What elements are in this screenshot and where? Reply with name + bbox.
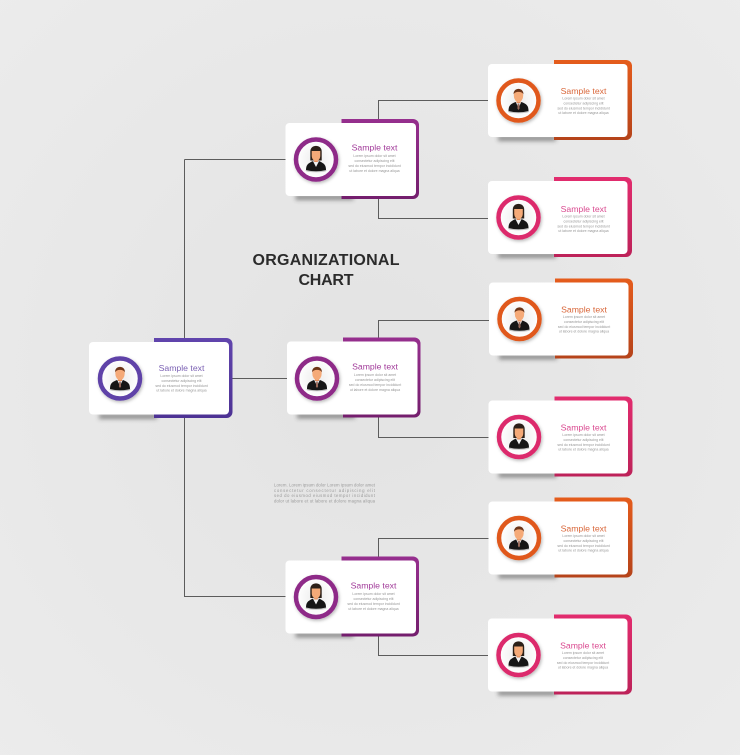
avatar ring [100, 358, 140, 398]
card colored backing [555, 278, 633, 358]
avatar ring [297, 358, 337, 398]
card colored backing [554, 498, 632, 578]
description text block: consectetur consectetur adipiscing elit [274, 488, 376, 493]
icon: man [306, 367, 328, 391]
card white panel [287, 342, 418, 414]
card white panel [488, 400, 628, 474]
card body text: sed do eiusmod tempor incididunt [557, 661, 609, 665]
card body text [558, 315, 610, 334]
card colored backing [154, 338, 232, 418]
description text block: Lorem. Lorem ipsum dolor Lorem ipsum dolor amet [274, 482, 376, 488]
connector lines [184, 100, 490, 656]
avatar ring [498, 635, 538, 675]
icon: man [508, 526, 530, 551]
card body text: sed do eiusmod tempor incididunt [557, 443, 610, 447]
card colored backing [342, 556, 419, 636]
description text block [274, 482, 376, 504]
avatar ring [499, 518, 539, 558]
card body text [557, 96, 610, 115]
card body text [557, 214, 610, 233]
card colored backing [554, 60, 632, 140]
icon: woman [508, 423, 530, 450]
card body text: ut labore et dolore magna aliqua [348, 607, 399, 611]
avatar ring [499, 417, 539, 457]
icon: woman [306, 583, 326, 610]
avatar ring [500, 299, 540, 339]
card body text: consectetur adipiscing elit [563, 539, 604, 543]
card heading: Sample text [159, 363, 205, 373]
card body text: consectetur adipiscing elit [564, 320, 604, 324]
card body text: consectetur adipiscing elit [354, 159, 395, 163]
card shadow [498, 574, 556, 578]
icon: man [509, 307, 530, 332]
card heading: Sample text [560, 640, 607, 650]
card shadow [499, 354, 557, 360]
description text block: dolor ut labore et ut labore et dolore magna aliqua [274, 498, 376, 504]
card white panel [488, 618, 628, 692]
card body text: ut labore et dolore magna aliqua [349, 169, 400, 173]
card colored backing [554, 614, 632, 694]
card shadow [498, 690, 556, 696]
title [252, 252, 400, 289]
card body text: sed do eiusmod tempor incididunt [557, 544, 610, 548]
card body text: ut labore et dolore magna aliqua [558, 111, 609, 115]
icon: woman [306, 146, 326, 172]
card colored backing [342, 119, 419, 199]
card body text: ut labore et dolore magna aliqua [350, 388, 400, 392]
card body text [557, 651, 609, 670]
card: staff 2 pink [488, 177, 632, 258]
card shadow [498, 472, 556, 478]
card body text [347, 592, 400, 611]
avatar ring [498, 80, 538, 120]
card body text: sed do eiusmod tempor incididunt [348, 164, 401, 168]
card heading: Sample text [351, 580, 397, 590]
card heading: Sample text [561, 304, 608, 314]
card: staff 5 orange [488, 498, 632, 578]
card body text: Lorem ipsum dolor sit amet [353, 154, 396, 158]
card body text: sed do eiusmod tempor incididunt [558, 325, 610, 329]
card: staff 1 orange [488, 60, 632, 141]
card body text: ut labore et dolore magna aliqua [558, 448, 609, 452]
card body text [348, 154, 401, 173]
card body text: Lorem ipsum dolor sit amet [160, 374, 203, 378]
icon: woman [508, 641, 529, 668]
card shadow [296, 632, 354, 638]
card heading: Sample text [561, 204, 607, 214]
card heading: Sample text [561, 422, 607, 432]
card body text [349, 373, 401, 392]
card body text: Lorem ipsum dolor sit amet [562, 214, 605, 218]
card body text: sed do eiusmod tempor incididunt [347, 602, 400, 606]
avatar ring [498, 198, 538, 238]
card heading: Sample text [352, 142, 398, 152]
card: staff 4 pink [488, 396, 632, 478]
card shadow [296, 195, 354, 200]
card body text: Lorem ipsum dolor sit amet [354, 373, 396, 377]
card body text: ut labore et dolore magna aliqua [156, 389, 207, 393]
card shadow [297, 414, 355, 418]
card shadow [498, 253, 556, 258]
card body text [557, 534, 610, 552]
description text block: sed do eiusmod eiusmod tempor incididunt [274, 493, 376, 498]
card shadow [498, 136, 556, 141]
card body text [155, 374, 208, 393]
card body text: consectetur adipiscing elit [563, 656, 603, 660]
card body text: consectetur adipiscing elit [355, 378, 395, 382]
card colored backing [554, 396, 632, 476]
card body text: ut labore et dolore magna aliqua [558, 229, 609, 233]
card body text: Lorem ipsum dolor sit amet [562, 534, 605, 538]
card body text: consectetur adipiscing elit [563, 101, 604, 105]
card body text: ut labore et dolore magna aliqua [558, 666, 608, 670]
card heading: Sample text [352, 362, 399, 372]
card: manager bottom [286, 556, 419, 638]
card: manager middle [287, 338, 420, 418]
icon: man [508, 89, 529, 113]
card body text: consectetur adipiscing elit [563, 438, 604, 442]
avatar ring [296, 140, 336, 180]
card body text: sed do eiusmod tempor incididunt [349, 383, 401, 387]
card white panel [488, 502, 628, 574]
card shadow [99, 414, 157, 419]
card: staff 3 orange [489, 278, 633, 360]
card colored backing [343, 338, 420, 418]
card body text: consectetur adipiscing elit [161, 379, 202, 383]
card heading: Sample text [561, 86, 607, 96]
card body text: sed do eiusmod tempor incididunt [155, 384, 208, 388]
icon: man [110, 367, 130, 391]
card body text: Lorem ipsum dolor sit amet [562, 433, 605, 437]
card body text: Lorem ipsum dolor sit amet [562, 651, 604, 655]
card body text: ut labore et dolore magna aliqua [558, 548, 609, 552]
card white panel [488, 181, 628, 254]
avatar ring [296, 577, 336, 617]
card body text: Lorem ipsum dolor sit amet [563, 315, 605, 319]
card white panel [89, 342, 229, 414]
title: CHART [298, 272, 354, 289]
card body text: Lorem ipsum dolor sit amet [352, 592, 395, 596]
card white panel [488, 64, 628, 137]
card heading: Sample text [561, 524, 607, 534]
card body text: sed do eiusmod tempor incididunt [557, 224, 610, 228]
card: manager top [286, 119, 419, 200]
icon: woman [508, 204, 529, 230]
card body text: sed do eiusmod tempor incididunt [557, 106, 610, 110]
card body text: consectetur adipiscing elit [563, 219, 604, 223]
card white panel [489, 282, 628, 356]
card: staff 6 pink [488, 614, 632, 696]
card white panel [286, 560, 416, 634]
card body text: ut labore et dolore magna aliqua [559, 330, 609, 334]
card body text: consectetur adipiscing elit [353, 597, 394, 601]
card colored backing [554, 177, 632, 257]
card white panel [286, 123, 416, 196]
card: root manager [89, 338, 232, 419]
card body text [557, 433, 610, 452]
card body text: Lorem ipsum dolor sit amet [562, 96, 605, 100]
title: ORGANIZATIONAL [252, 252, 400, 269]
